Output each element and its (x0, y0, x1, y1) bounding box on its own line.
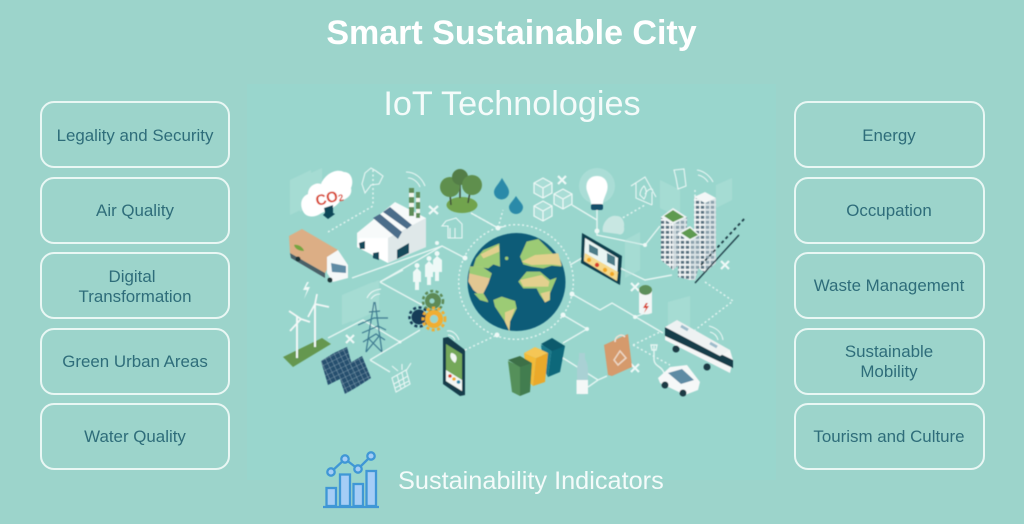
indicator: Water Quality: Water Quality (84, 427, 186, 446)
icon: gears (410, 291, 445, 330)
indicator: Sustainable Mobility: Sustainable (845, 342, 933, 361)
south america (493, 297, 517, 331)
icon: water drops (494, 178, 523, 214)
indicator: Digital Transformation: Digital (109, 267, 155, 286)
title: Smart Sustainable City (326, 14, 697, 52)
icon: small solar outline (392, 363, 411, 392)
icon: light bulb (579, 168, 615, 210)
decorative haze panels (290, 168, 732, 336)
bin: yellow (524, 347, 548, 386)
bin: teal (541, 338, 565, 377)
indicator: Digital Transformation (41, 253, 229, 318)
indicator: Energy (795, 102, 984, 167)
label: Sustainability Indicators: Sustainability Indicators (398, 467, 664, 495)
indicator: Air Quality: Air Quality (96, 201, 175, 220)
icon: CO2 cloud: CO (314, 188, 340, 210)
icon: green roof towers (661, 192, 746, 283)
icon: CO2 cloud (301, 171, 352, 219)
indicator: Tourism and Culture (795, 404, 984, 469)
icon: smartphone (443, 331, 465, 396)
sparkle marks (346, 176, 729, 372)
indicator: Green Urban Areas: Green Urban Areas (62, 352, 208, 371)
indicator: Air Quality (41, 178, 229, 243)
icon: tablet dashboard (581, 233, 622, 285)
icon: CO2 cloud: 2 (337, 192, 345, 204)
indicator: Occupation: Occupation (846, 201, 932, 220)
indicator: Legality and Security: Legality and Security (57, 126, 214, 145)
indicator: Water Quality (41, 404, 229, 469)
icon: eco house outline (631, 177, 656, 205)
indicator: Waste Management: Waste Management (814, 276, 965, 295)
panel: left indicators (41, 102, 229, 469)
icon: recycling bins (508, 338, 565, 396)
icon: people (413, 251, 442, 290)
icon: wifi on tower (697, 170, 713, 182)
icon: wifi on pylon (367, 289, 381, 299)
indicator: Tourism and Culture: Tourism and Culture (813, 427, 965, 446)
icon: earth globe (468, 233, 566, 331)
icon: solar panels (321, 347, 371, 394)
heading: IoT Technologies: IoT Technologies (383, 85, 641, 123)
icon: building outline (442, 218, 462, 238)
icon: power pylon (358, 302, 388, 352)
indicator: Sustainable Mobility (795, 329, 984, 394)
icon: electric plug (651, 345, 664, 373)
indicator: Occupation (795, 178, 984, 243)
indicator: Legality and Security (41, 102, 229, 167)
icon: recycled shopping bag (604, 334, 632, 376)
icon: sustainability bar chart (323, 452, 379, 507)
icon: wind turbines (283, 282, 331, 367)
africa (518, 272, 557, 302)
icon: delivery truck (289, 229, 348, 282)
icon: electric car (658, 365, 700, 396)
icon: cubes (534, 178, 572, 221)
panel: IoT illustration (247, 84, 776, 480)
icon: plastic bottle (576, 353, 588, 394)
panel: right indicators (795, 102, 984, 469)
icon: factory with solar roof (357, 172, 426, 263)
bin: green (508, 356, 532, 396)
indicator: Waste Management (795, 253, 984, 318)
tower: left (661, 208, 687, 270)
icon: recycling outline (362, 168, 383, 193)
icon: recycle cup (674, 169, 686, 189)
tower: tall (694, 192, 716, 273)
indicator: Sustainable Mobility: Mobility (860, 362, 918, 381)
indicator: Energy: Energy (862, 126, 916, 145)
eurasia (520, 239, 562, 268)
indicator: Digital Transformation: Transformation (79, 287, 191, 306)
tower: middle (678, 226, 700, 280)
north america (473, 243, 500, 268)
icon: electric bus (665, 320, 733, 373)
illustration: connected city (283, 168, 746, 396)
indicator: Green Urban Areas (41, 329, 229, 394)
icon: trees (440, 169, 482, 213)
network lines (328, 170, 733, 387)
icon: battery (639, 285, 652, 314)
icon: cloud outline (603, 216, 624, 235)
